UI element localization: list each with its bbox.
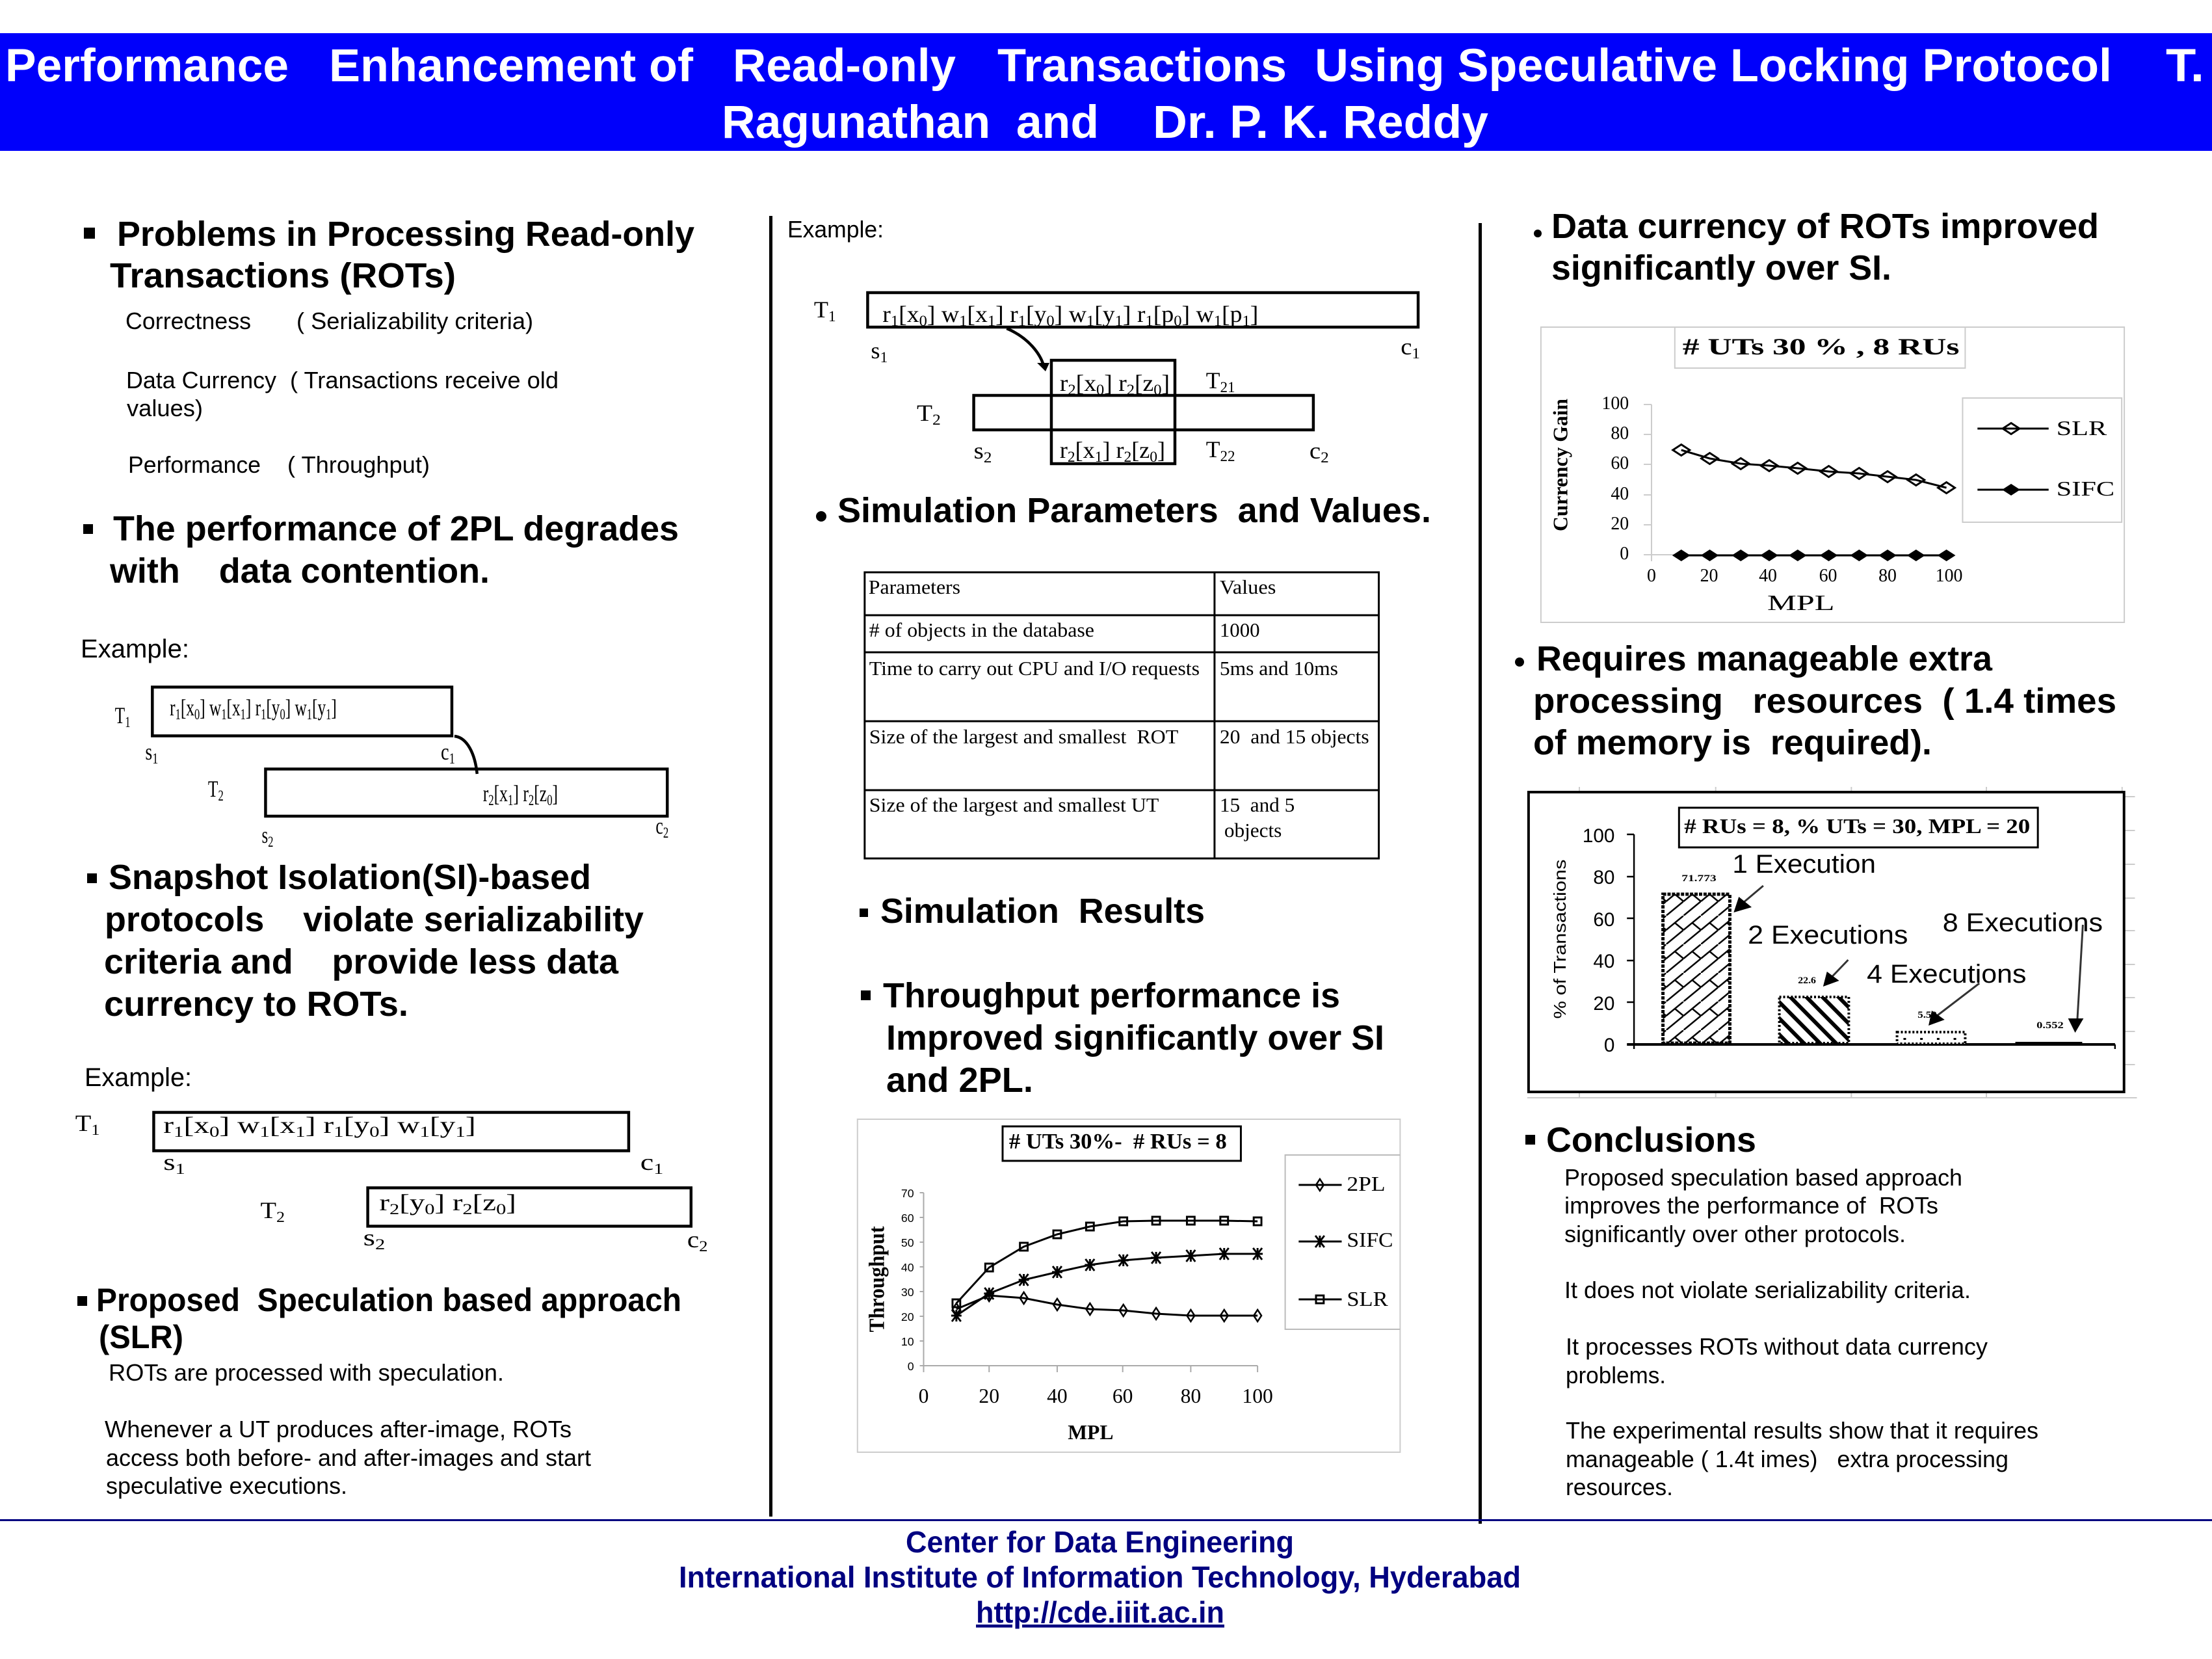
table: simulation parameters: Values [1220,576,1276,598]
annotation labels: 2 Executions [1748,921,1908,949]
series: SLR [956,1221,1257,1303]
panel: right column [1515,207,2137,1500]
bars [1663,894,2082,1044]
chart axes: 0 [1647,566,1656,586]
heading: snapshot isolation: currency to ROTs. [104,985,408,1024]
text block: problem list: ( Transactions receive old [290,367,559,393]
bar values: 71.773 [1681,873,1717,884]
table: simulation parameters: Parameters [869,576,960,598]
chart axes: 60 [1113,1385,1133,1407]
chart title: # UTs 30%- # RUs = 8 [1009,1130,1227,1154]
heading: snapshot isolation: protocols violate serializability [105,900,644,939]
table: simulation parameters: 5ms and 10ms [1220,657,1338,680]
diagram: 2PL example: r1[x0] w1[x1] r1[y0] w1[y1] [170,695,337,723]
chart axes: 0 [908,1360,914,1373]
text block: conclusions [1564,1164,2038,1500]
series: SIFC [1681,554,1947,557]
chart axes: MPL [1767,591,1834,615]
table: simulation parameters [865,572,1379,858]
diagram: speculative execution example: r2[x1] r2[z0] [1060,437,1165,466]
text block: conclusions: resources. [1566,1474,1673,1500]
diagram: speculative execution example: s2 [974,438,992,466]
panel: left column [75,215,708,1499]
chart axes: 0 [919,1385,928,1407]
header banner [0,33,2212,151]
chart axes: 100 [1601,393,1629,414]
heading: 2PL degrades: The performance of 2PL degrades [113,509,679,548]
diagram: speculative execution example: T2 [917,400,941,429]
heading: proposed approach: (SLR) [99,1319,183,1355]
chart axes: % of Transactions [1551,860,1570,1018]
chart axes: 10 [901,1335,914,1348]
chart axes: 20 [979,1385,999,1407]
table: simulation parameters: # of objects in the database [869,618,1094,641]
diagram: snapshot isolation example: r2[y 0] r 2[z 0] [379,1189,516,1219]
heading: 2PL degrades: with data contention. [109,551,490,591]
diagram: snapshot isolation example: T1 [75,1110,99,1139]
chart axes: 60 [1819,566,1837,586]
title: Dr. P. K. Reddy [1153,97,1489,148]
text block: problem list: values) [127,395,203,421]
chart axes: 40 [1047,1385,1068,1407]
diagram: snapshot isolation example: s1 [163,1149,185,1178]
title: T. [2166,40,2204,92]
chart title [1675,327,1965,368]
chart axes: 30 [901,1286,914,1299]
footer [0,1519,2212,1629]
line chart: currency gain vs MPL [1541,327,2124,622]
heading: data currency: significantly over SI. [1551,248,1891,287]
diagram: speculative execution example: r1[x0] w1[x1] r1[y0] w1[y1] r1[p0] w1[p1] [882,301,1258,330]
chart axes: 100 [1242,1385,1273,1407]
chart title: # UTs 30 % , 8 RUs [1683,334,1959,360]
diagram: 2PL example: s1 [145,739,158,767]
heading: 2PL degrades [83,509,679,591]
table: simulation parameters: Size of the largest and smallest UT [869,793,1159,816]
diagram: snapshot isolation example: c1 [640,1149,663,1178]
text block: proposed approach [105,1359,591,1499]
diagram: speculative execution example [814,293,1420,466]
title: Ragunathan and [722,97,1099,148]
chart axes: 0 [1604,1035,1614,1056]
bar chart: executions per transaction [1527,787,2137,1098]
heading: snapshot isolation [87,858,644,1024]
chart axes: 100 [1583,825,1614,847]
title: Using Speculative Locking Protocol [1315,40,2112,92]
chart axes: 20 [1611,514,1629,534]
text block: conclusions: problems. [1566,1362,1666,1388]
line chart: throughput vs MPL [858,1119,1400,1452]
chart legend: SIFC [1347,1228,1393,1251]
diagram: speculative execution example: c1 [1401,334,1420,362]
chart axes: 60 [1611,453,1629,473]
diagram: 2PL example: T2 [208,776,224,804]
heading: throughput performance: Throughput performance is [883,976,1340,1015]
chart legend [1962,398,2122,522]
title [5,40,2204,148]
chart legend: SLR [1347,1288,1388,1310]
chart axes: MPL [1068,1421,1113,1444]
diagram: speculative execution example: T1 [814,297,836,325]
bar values: 22.6 [1798,975,1817,986]
table: simulation parameters: Size of the largest and smallest ROT [869,725,1178,748]
text block: conclusions: manageable ( 1.4t imes) extra processing [1566,1446,2008,1472]
table: simulation parameters: 1000 [1220,618,1260,641]
heading: problems in processing ROTs: Problems in Processing Read-only [117,215,694,254]
bar values: 0.552 [2036,1020,2064,1031]
chart legend: SLR [2057,417,2107,440]
heading: snapshot isolation: criteria and provide less data [104,942,619,981]
title: Transactions [997,40,1287,92]
heading: conclusions: Conclusions [1546,1121,1756,1160]
heading: proposed approach [77,1282,681,1355]
heading: data currency [1534,207,2099,287]
chart axes [1549,393,1962,615]
annotation labels: 4 Executions [1867,960,2026,989]
text block: conclusions: improves the performance of ROTs [1564,1192,1938,1219]
text block: conclusions: It processes ROTs without data currency [1566,1333,1988,1360]
example label: Example: [81,635,189,663]
diagram: speculative execution example: T22 [1206,436,1235,465]
chart axes: 60 [901,1212,914,1225]
heading: manageable resources: of memory is required). [1533,723,1932,762]
heading: simulation results: Simulation Results [880,892,1205,931]
bar values [1681,873,2064,1031]
chart axes: 60 [1593,909,1614,931]
heading: proposed approach: Proposed Speculation based approach [96,1282,681,1318]
heading: manageable resources: processing resources ( 1.4 times [1533,682,2116,721]
text block: problem list: Correctness [125,308,251,334]
table: simulation parameters: 20 and 15 objects [1220,725,1369,748]
diagram: snapshot isolation example: r1[x 0] w 1[x 1] r 1[y 0] w 1[y 1] [163,1112,476,1141]
diagram: snapshot isolation example [75,1110,708,1256]
chart axes: Currency Gain [1549,399,1572,531]
heading: throughput performance [861,976,1384,1100]
chart axes: 40 [901,1261,914,1274]
chart axes: 80 [1181,1385,1201,1407]
text block: problem list: Performance [128,451,261,478]
annotation labels [1732,850,2103,989]
title: Performance [5,40,289,92]
heading: manageable resources: Requires manageable extra [1536,639,1993,678]
table: simulation parameters: 15 and 5 [1220,793,1295,816]
diagram: speculative execution example: r2[x0] r2[z0] [1060,370,1170,399]
chart axes: Throughput [865,1226,889,1332]
chart title [1679,808,2038,847]
heading: throughput performance: and 2PL. [886,1061,1033,1100]
heading: throughput performance: Improved significantly over SI [886,1018,1384,1057]
chart axes [1551,825,2115,1056]
text block: conclusions: The experimental results show that it requires [1566,1417,2038,1444]
arrows [1733,886,2083,1033]
diagram: 2PL example: r2[x1] r2[z0] [483,780,558,809]
title: Read-only [733,40,956,92]
heading: problems in processing ROTs: Transactions (ROTs) [110,256,456,295]
annotation labels: 1 Execution [1732,850,1876,879]
chart axes: 40 [1759,566,1777,586]
example label: Example: [85,1063,192,1092]
diagram: 2PL example: c1 [441,739,455,767]
diagram: speculative execution example: T21 [1206,367,1235,396]
chart title [1003,1126,1241,1161]
text block: proposed approach: speculative executions. [106,1472,347,1499]
table: simulation parameters: objects [1224,819,1282,842]
chart legend: SIFC [2057,477,2114,500]
chart legend: 2PL [1347,1173,1386,1195]
diagram: snapshot isolation example: s2 [363,1225,385,1254]
chart title: # RUs = 8, % UTs = 30, MPL = 20 [1684,815,2030,838]
text block: conclusions: It does not violate serializability criteria. [1564,1277,1971,1303]
chart axes: 40 [1593,951,1614,972]
text block: proposed approach: access both before- and after-images and start [106,1444,591,1471]
series: SLR [1681,450,1947,488]
bar values: 5.59 [1917,1010,1937,1020]
diagram: speculative execution example: c2 [1310,438,1329,466]
chart axes: 70 [901,1187,914,1200]
text block: problem list: Data Currency [126,367,276,393]
chart axes: 0 [1620,544,1629,564]
chart axes: 20 [1700,566,1718,586]
diagram: 2PL example [115,687,668,851]
heading: snapshot isolation: Snapshot Isolation(SI)-based [109,858,591,897]
footer: International Institute of Information Technology, Hyderabad [679,1560,1521,1594]
text block: proposed approach: ROTs are processed with speculation. [109,1359,504,1386]
panel: middle column [787,216,1431,1452]
chart axes: 20 [901,1310,914,1323]
chart axes: 40 [1611,484,1629,504]
example label: Example: [787,216,884,243]
text block: problem list: ( Throughput) [287,451,430,478]
chart axes: 80 [1593,867,1614,888]
text block: problem list [125,308,559,478]
series: SIFC [956,1254,1257,1316]
text block: problem list: ( Serializability criteria) [296,308,533,334]
diagram: 2PL example: s2 [261,822,273,851]
text block: proposed approach: Whenever a UT produces after-image, ROTs [105,1416,572,1442]
chart axes: 20 [1593,993,1614,1015]
series: 2PL [956,1295,1257,1316]
heading: data currency: Data currency of ROTs improved [1551,207,2099,246]
diagram: snapshot isolation example: c2 [687,1227,708,1256]
chart axes: 80 [1878,566,1897,586]
diagram: 2PL example: T1 [115,702,130,731]
heading: manageable resources [1515,639,2116,762]
chart axes: 100 [1936,566,1962,586]
footer: http://cde.iiit.ac.in [976,1595,1224,1629]
title: Enhancement of [329,40,693,92]
diagram: snapshot isolation example: T2 [261,1197,285,1227]
table: simulation parameters: Time to carry out CPU and I/O requests [869,657,1200,680]
diagram: speculative execution example: s1 [871,338,888,366]
heading: problems in processing ROTs [84,215,694,295]
chart axes [865,1187,1273,1444]
text block: conclusions: significantly over other protocols. [1564,1221,1906,1247]
annotation labels: 8 Executions [1943,909,2103,937]
heading: simulation parameters: Simulation Parameters and Values. [837,491,1431,530]
chart legend [1285,1155,1400,1329]
text block: conclusions: Proposed speculation based approach [1564,1164,1962,1191]
chart axes: 50 [901,1236,914,1249]
footer: Center for Data Engineering [906,1525,1294,1559]
chart axes: 80 [1611,423,1629,444]
diagram: 2PL example: c2 [655,813,668,842]
